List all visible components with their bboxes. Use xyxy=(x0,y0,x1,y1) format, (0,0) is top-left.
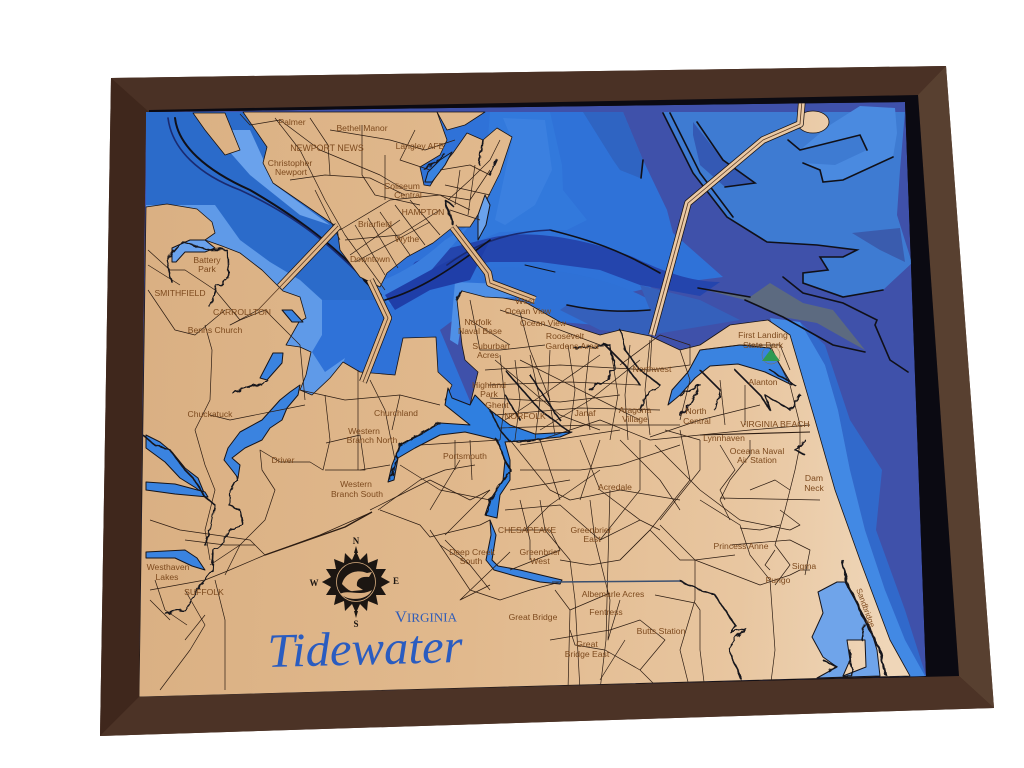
place labels: Alanton xyxy=(748,377,778,387)
place labels xyxy=(147,117,877,659)
framed wooden map xyxy=(100,66,994,736)
place labels: Naval Base xyxy=(458,326,502,336)
compass rose with dolphin: E xyxy=(393,576,399,586)
place labels: Greenbrier xyxy=(570,525,612,535)
land: wood layer xyxy=(139,111,910,697)
place labels: NORFOLK xyxy=(504,411,546,421)
land: Fort Wool island xyxy=(797,111,829,133)
first landing state park tree icon xyxy=(762,346,780,364)
bridge: hampton roads xyxy=(453,227,535,300)
place labels: CHESAPEAKE xyxy=(498,525,556,535)
place labels: Sandbridge xyxy=(854,587,877,629)
place labels: North xyxy=(685,406,707,416)
place labels: Butts Station xyxy=(637,626,686,636)
place labels: Coliseum xyxy=(384,181,420,191)
land: north tip xyxy=(437,112,485,130)
place labels: Western xyxy=(348,426,380,436)
bridges and tunnels xyxy=(258,100,802,382)
place labels: Newport xyxy=(275,167,308,177)
rivers and lakes xyxy=(146,152,880,678)
land: Virginia Peninsula xyxy=(243,112,512,287)
place labels: West xyxy=(515,296,535,306)
frame and shadow gap xyxy=(100,66,994,736)
water depth layers xyxy=(139,102,926,697)
place labels: Westhaven xyxy=(147,562,190,572)
subtitle: Virginia: VIRGINIA xyxy=(395,608,457,626)
place labels: Acres xyxy=(477,350,499,360)
bridge: chesapeake bay xyxy=(652,100,802,335)
place labels: Palmer xyxy=(278,117,306,127)
place labels: Central xyxy=(683,416,711,426)
place labels: Great Bridge xyxy=(509,612,558,622)
place labels: State Park xyxy=(743,340,784,350)
place labels: Aragona xyxy=(619,405,651,415)
place labels: Portsmouth xyxy=(443,451,487,461)
place labels: Albemarle Acres xyxy=(582,589,644,599)
place labels: Western xyxy=(340,479,372,489)
place labels: Air Station xyxy=(737,455,777,465)
place labels: Briarfield xyxy=(358,219,392,229)
compass rose with dolphin: S xyxy=(353,619,359,629)
bridge: monitor merrimac xyxy=(258,226,338,310)
place labels: South xyxy=(460,556,482,566)
place labels: Oceana Naval xyxy=(730,446,784,456)
title: Tidewater: Tidewater xyxy=(267,620,464,678)
place labels: Ocean View xyxy=(520,318,567,328)
place labels: Highland xyxy=(472,380,506,390)
place labels: HAMPTON xyxy=(402,207,444,217)
place labels: Benns Church xyxy=(188,325,242,335)
place labels: Princess Anne xyxy=(714,541,769,551)
place labels: Village xyxy=(622,414,648,424)
land: south Hampton Roads xyxy=(139,204,910,697)
place labels: Sigma xyxy=(792,561,816,571)
place labels: Downtown xyxy=(350,254,390,264)
place labels: Greenbrier xyxy=(519,547,561,557)
black tidal creeks and canal xyxy=(145,140,885,680)
compass rose with dolphin xyxy=(310,536,399,629)
place labels: Battery xyxy=(193,255,221,265)
place labels: Deep Creek xyxy=(449,547,496,557)
place labels: Neck xyxy=(804,483,824,493)
place labels: Janaf xyxy=(574,408,596,418)
compass rose with dolphin: W xyxy=(310,578,318,588)
place labels: Bridge East xyxy=(565,649,610,659)
place labels: CARROLLTON xyxy=(213,307,271,317)
place labels: Acredale xyxy=(598,482,632,492)
place labels: Branch South xyxy=(331,489,383,499)
place labels: Branch North xyxy=(347,435,398,445)
place labels: Churchland xyxy=(374,408,418,418)
canal line xyxy=(552,581,680,582)
place labels: Ghent xyxy=(485,400,509,410)
place labels: Park xyxy=(198,264,217,274)
place labels: Wythe xyxy=(395,234,419,244)
place labels: East xyxy=(583,534,601,544)
place labels: NEWPORT NEWS xyxy=(290,143,364,153)
place labels: Great xyxy=(576,639,598,649)
place labels: Roosevelt xyxy=(546,331,585,341)
place labels: Chuckatuck xyxy=(188,409,233,419)
place labels: West xyxy=(530,556,550,566)
place labels: Suburban xyxy=(472,341,510,351)
depth contour lines xyxy=(168,113,908,372)
place labels: SUFFOLK xyxy=(184,587,224,597)
place labels: SMITHFIELD xyxy=(154,288,206,298)
place labels: Central xyxy=(394,190,422,200)
compass rose with dolphin: N xyxy=(353,536,360,546)
place labels: Driver xyxy=(272,455,295,465)
land: north shore point xyxy=(193,113,240,155)
place labels: Ocean View xyxy=(505,306,552,316)
place labels: Norfolk xyxy=(464,317,492,327)
bridge: downtown tunnel span xyxy=(363,280,388,382)
place labels: Park xyxy=(480,389,499,399)
place labels: Lynnhaven xyxy=(703,433,745,443)
place labels: VIRGINIA BEACH xyxy=(740,419,810,429)
place labels: First Landing xyxy=(738,330,788,340)
place labels: Pungo xyxy=(766,575,791,585)
place labels: Langley AFB xyxy=(396,141,445,151)
place labels: Northwest xyxy=(633,364,672,374)
place labels: Bethel Manor xyxy=(336,123,388,133)
place labels: Gardens Area xyxy=(545,341,599,351)
place labels: Dam xyxy=(805,473,823,483)
roads xyxy=(148,114,820,690)
place labels: Lakes xyxy=(156,572,178,582)
dolphin xyxy=(342,571,372,591)
place labels: Fentress xyxy=(589,607,623,617)
place labels: Christopher xyxy=(268,158,312,168)
